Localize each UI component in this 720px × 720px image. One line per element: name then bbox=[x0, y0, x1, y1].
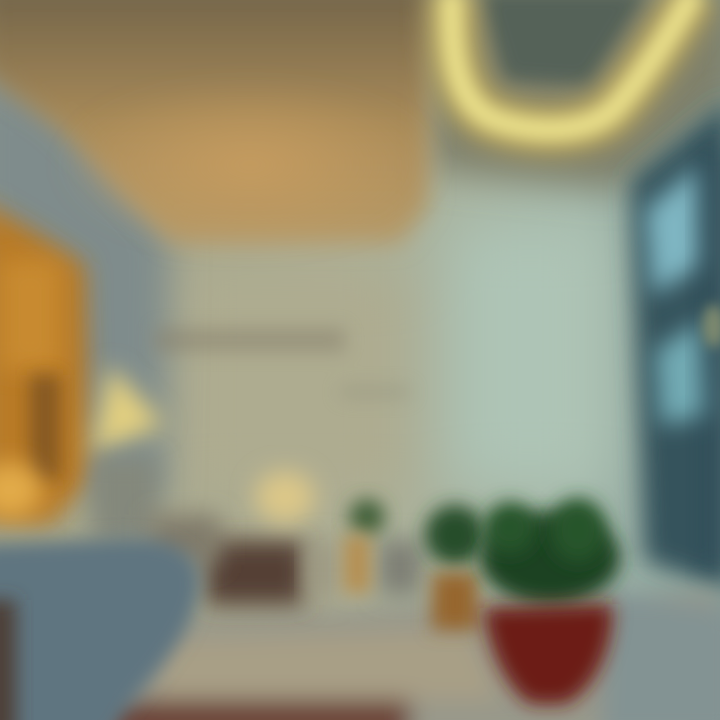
panel: right ceiling bbox=[420, 0, 720, 190]
panel: warm ceiling bbox=[0, 0, 440, 250]
text smudge: wall lettering bbox=[155, 328, 410, 398]
panel: orange wall art bbox=[0, 200, 90, 525]
panel: left wall bbox=[0, 60, 170, 500]
panel: teal wall glow bbox=[170, 220, 610, 500]
window pane lower bbox=[655, 320, 712, 425]
lamp glint bbox=[704, 304, 720, 348]
panel: right window bbox=[630, 100, 720, 590]
icon: small vase and plant bbox=[344, 499, 385, 593]
panel: blue sofa bbox=[0, 538, 201, 720]
icon: glowing ceiling light ring bbox=[452, 0, 695, 130]
icon: left table lamp bbox=[90, 365, 165, 543]
icon: small table lamp bbox=[255, 471, 336, 600]
icon: large potted plant bbox=[480, 498, 620, 704]
icon: orange pot plant bbox=[425, 505, 485, 630]
window pane upper bbox=[645, 165, 702, 295]
panel: console and cushions bbox=[150, 515, 422, 605]
panel: floor bbox=[100, 590, 720, 720]
